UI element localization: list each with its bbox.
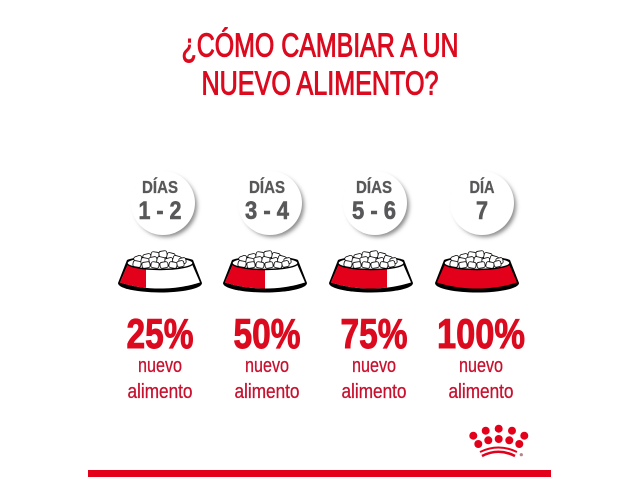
- title: NUEVO ALIMENTO?: [202, 66, 438, 102]
- badge: days 3-4: DÍAS: [249, 176, 285, 197]
- icon: bowl 75% red: [329, 250, 413, 292]
- badge: days 5-6: [343, 171, 409, 237]
- step: days 3-4: [223, 171, 307, 403]
- label: 25% nuevo alimento: nuevo: [138, 355, 182, 377]
- label: 75% nuevo alimento: [340, 310, 408, 403]
- badge: days 1-2: DÍAS: [142, 176, 178, 197]
- badge: days 5-6: 5 - 6: [352, 197, 396, 225]
- label: 100% nuevo alimento: alimento: [448, 381, 514, 403]
- label: 75% nuevo alimento: nuevo: [352, 355, 396, 377]
- logo: Royal Canin crown: [469, 425, 528, 456]
- step: days 5-6: [329, 171, 413, 403]
- badge: days 3-4: 3 - 4: [245, 197, 289, 225]
- label: 100% nuevo alimento: 100%: [437, 310, 525, 357]
- step: day 7: [435, 171, 525, 403]
- badge: days 3-4: [238, 171, 304, 237]
- icon: bowl 25% red: [118, 250, 202, 292]
- label: 50% nuevo alimento: alimento: [234, 381, 300, 403]
- title: ¿CÓMO CAMBIAR A UN: [182, 26, 458, 64]
- icon: bowl 50% red: [223, 250, 307, 292]
- label: 25% nuevo alimento: [126, 310, 194, 403]
- icon: bowl 100% red: [435, 250, 519, 292]
- label: 50% nuevo alimento: nuevo: [245, 355, 289, 377]
- badge: days 1-2: 1 - 2: [138, 197, 182, 225]
- badge: day 7: [450, 171, 516, 237]
- label: 75% nuevo alimento: 75%: [340, 310, 408, 357]
- badge: day 7: DÍA: [470, 176, 495, 197]
- badge: day 7: 7: [476, 197, 488, 225]
- label: 50% nuevo alimento: 50%: [234, 310, 300, 357]
- step: days 1-2: [118, 171, 202, 403]
- label: 25% nuevo alimento: 25%: [126, 310, 194, 357]
- footer bar: [88, 470, 551, 477]
- badge: days 5-6: DÍAS: [356, 176, 392, 197]
- label: 100% nuevo alimento: nuevo: [459, 355, 503, 377]
- title: [182, 26, 458, 102]
- badge: days 1-2: [131, 171, 197, 237]
- label: 100% nuevo alimento: [437, 310, 525, 403]
- label: 50% nuevo alimento: [234, 310, 300, 403]
- label: 75% nuevo alimento: alimento: [342, 381, 406, 403]
- label: 25% nuevo alimento: alimento: [128, 381, 192, 403]
